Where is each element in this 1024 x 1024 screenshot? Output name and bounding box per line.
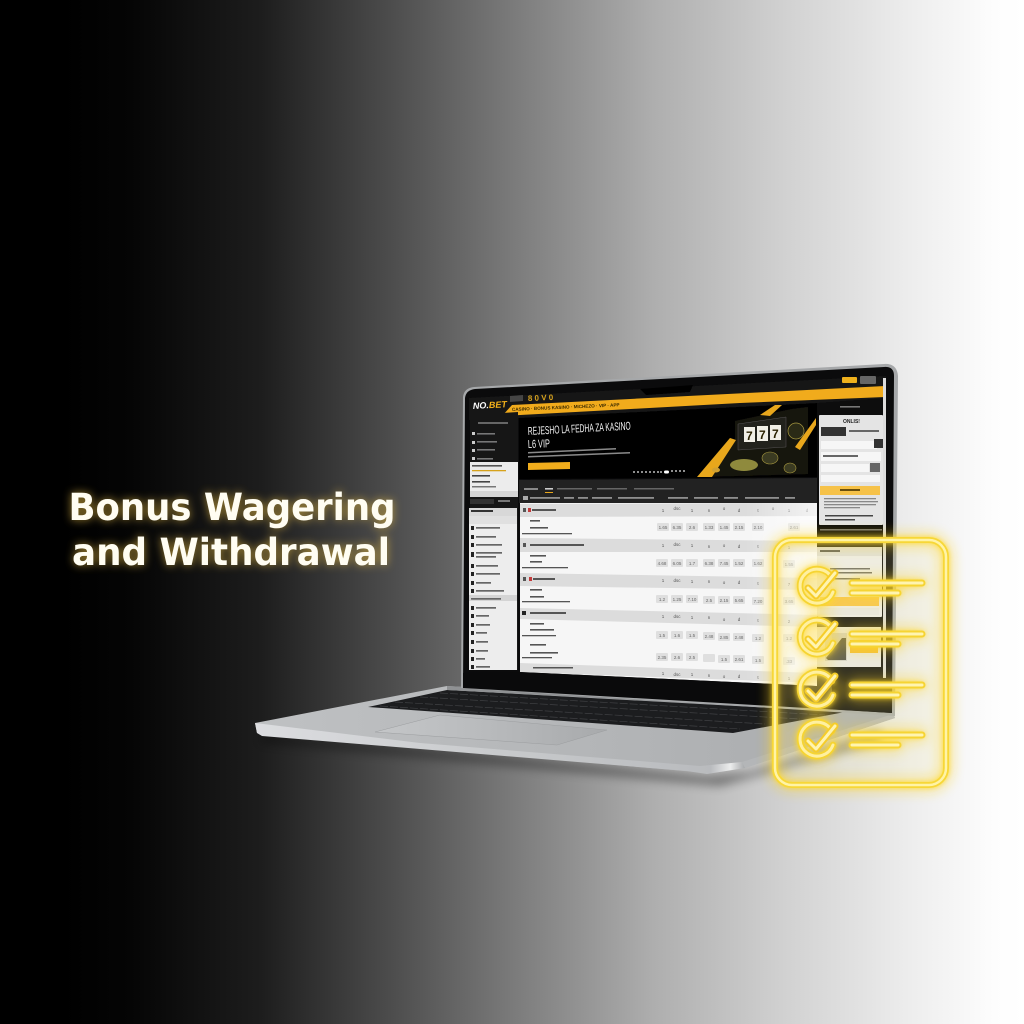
laptop xyxy=(255,364,898,786)
neon outer glow xyxy=(775,540,946,785)
odds values: 2.48 xyxy=(705,634,714,639)
league row column labels: o xyxy=(723,674,726,679)
slot machine art: 7 xyxy=(772,427,779,441)
league row column labels: t xyxy=(757,581,759,586)
league row column labels: n xyxy=(708,673,711,678)
league row column labels: 7 xyxy=(788,582,791,587)
league row column labels: n xyxy=(708,508,711,513)
odds values: 7.45 xyxy=(720,561,729,566)
screen top navigation: NO.BET xyxy=(473,399,509,411)
league row column labels: n xyxy=(708,544,711,549)
slot machine art: 7 xyxy=(746,429,753,443)
odds values: 2.61 xyxy=(735,657,744,662)
odds values: 2.15 xyxy=(720,598,729,603)
league row column labels: dsc xyxy=(673,506,681,511)
yellow menu band xyxy=(502,386,885,416)
hero banner: REJESHO LA FEDHA ZA KASINO xyxy=(528,421,631,438)
odds values: 1.6 xyxy=(674,633,681,638)
odds values: 1.55 xyxy=(785,562,794,567)
slider dots xyxy=(633,470,685,474)
odds values: 2.5 xyxy=(706,598,713,603)
odds values: .33 xyxy=(786,659,793,664)
screen top navigation: 8 0 V 0 xyxy=(528,393,554,403)
league row column labels: 1 xyxy=(691,672,694,677)
league row column labels: d xyxy=(738,617,741,622)
QR card xyxy=(817,627,881,667)
odds values: 2.85 xyxy=(720,635,729,640)
right account panel: ONLIS! xyxy=(843,419,860,425)
odds values: 1.2 xyxy=(755,636,762,641)
neon near glow xyxy=(775,540,946,785)
league row column labels: d xyxy=(738,508,741,513)
hero banner: L6 VIP xyxy=(528,438,550,451)
league row column labels: o xyxy=(723,543,726,548)
odds values: 1.5 xyxy=(721,657,728,662)
league row column labels: 1 xyxy=(691,615,694,620)
league row column labels: n xyxy=(708,579,711,584)
laptop shadow xyxy=(262,730,880,786)
league row column labels: d xyxy=(806,508,809,513)
league row column labels: dsc xyxy=(673,542,681,547)
league row column labels: d xyxy=(738,580,741,585)
league row column labels: dsc xyxy=(673,672,681,677)
league row column labels: 1 xyxy=(662,543,665,548)
league row column labels: 1 xyxy=(662,671,665,676)
checklist icon xyxy=(745,503,948,787)
signup button xyxy=(820,486,880,495)
odds values: 7.20 xyxy=(754,599,763,604)
yellow menu band: CASINO · BONUS KASINO · MICHEZO · VIP · APP xyxy=(512,402,620,412)
league row column labels: dsc xyxy=(673,614,681,619)
league header rows xyxy=(520,503,817,683)
league list xyxy=(469,508,517,670)
league row column labels: t xyxy=(757,618,759,623)
check item 2 xyxy=(800,620,922,654)
odds values: 2.6 xyxy=(674,655,681,660)
trackpad xyxy=(375,715,607,745)
title xyxy=(68,486,396,574)
screen xyxy=(469,376,886,700)
odds values: 1.25 xyxy=(673,597,682,602)
hinge strip xyxy=(447,686,893,714)
league row column labels: dsc xyxy=(673,578,681,583)
title: Bonus Wagering xyxy=(68,486,396,529)
odds values: 2.48 xyxy=(735,635,744,640)
screen bottom edge xyxy=(463,672,892,713)
screen top navigation xyxy=(469,376,886,420)
league row column labels: n xyxy=(708,615,711,620)
sidebar xyxy=(469,412,518,670)
odds values: 7.10 xyxy=(688,597,697,602)
league row column labels: 1 xyxy=(691,579,694,584)
scrollbar xyxy=(883,378,886,678)
league row column labels: 1 xyxy=(788,508,791,513)
league row column labels: t xyxy=(757,508,759,513)
checklist frame xyxy=(775,540,946,785)
league row column labels: 1 xyxy=(691,543,694,548)
odds values: 1.5 xyxy=(755,658,762,663)
hero banner xyxy=(519,403,817,479)
promo card xyxy=(817,547,882,617)
checklist inner wash xyxy=(773,538,948,787)
odds values: 1.2 xyxy=(786,636,793,641)
odds values: 2.10 xyxy=(754,525,763,530)
match names xyxy=(522,520,572,658)
odds values: 1.33 xyxy=(705,525,714,530)
odds values: 6.35 xyxy=(673,525,682,530)
hero button xyxy=(528,462,570,470)
odds values: 1.45 xyxy=(720,525,729,530)
odds values: 1.5 xyxy=(659,633,666,638)
odds values: 1.5 xyxy=(689,633,696,638)
odds values: 2.35 xyxy=(658,655,667,660)
odds values: 2.5 xyxy=(689,655,696,660)
league row column labels: 1 xyxy=(662,508,665,513)
odds values: 4.68 xyxy=(658,561,667,566)
league row column labels: 1 xyxy=(691,508,694,513)
odds values: 2.6 xyxy=(689,525,696,530)
odds values: 6.05 xyxy=(673,561,682,566)
title: and Withdrawal xyxy=(72,531,390,574)
table fade near icon xyxy=(745,503,817,686)
signup card xyxy=(819,415,883,525)
odds values: 1.7 xyxy=(689,561,696,566)
league row column labels: d xyxy=(738,674,741,679)
check item 3 xyxy=(800,672,922,706)
odds values: 1.65 xyxy=(659,525,668,530)
league row column labels: 1 xyxy=(788,545,791,550)
bezel xyxy=(463,367,894,713)
league row column labels: 1 xyxy=(788,676,791,681)
odds values: 5.65 xyxy=(735,598,744,603)
laptop base xyxy=(255,686,895,774)
title: and Withdrawal xyxy=(72,531,390,574)
check item 4 xyxy=(800,722,922,756)
slot machine art xyxy=(697,405,816,477)
slot machine art: 7 xyxy=(759,428,766,442)
league row column labels: t xyxy=(757,544,759,549)
odds table xyxy=(520,503,817,686)
league row column labels: t xyxy=(757,675,759,680)
odds buttons xyxy=(656,523,800,665)
league row column labels: d xyxy=(738,544,741,549)
keyboard xyxy=(368,690,845,733)
odds values: 6.38 xyxy=(705,561,714,566)
league row column labels: 1 xyxy=(662,614,665,619)
odds values: 1.62 xyxy=(754,561,763,566)
laptop lid xyxy=(461,364,898,716)
right account panel xyxy=(817,378,886,700)
title: Bonus Wagering xyxy=(68,486,396,529)
odds values: 1.2 xyxy=(659,597,666,602)
league row column labels: o xyxy=(723,580,726,585)
league row column labels: 2 xyxy=(788,619,791,624)
odds values: 2.15 xyxy=(735,525,744,530)
league row column labels: o xyxy=(772,506,775,511)
league row column labels xyxy=(662,506,809,681)
odds values: 3.65 xyxy=(785,599,794,604)
bet slip card xyxy=(470,462,518,497)
league row column labels: o xyxy=(723,617,726,622)
check item 1 xyxy=(800,569,922,603)
odds values: 2.61 xyxy=(790,525,799,530)
odds values: 1.52 xyxy=(735,561,744,566)
league row column labels: 1 xyxy=(662,578,665,583)
odds values xyxy=(658,525,799,664)
sub navigation xyxy=(519,478,817,503)
league row column labels: o xyxy=(723,506,726,511)
